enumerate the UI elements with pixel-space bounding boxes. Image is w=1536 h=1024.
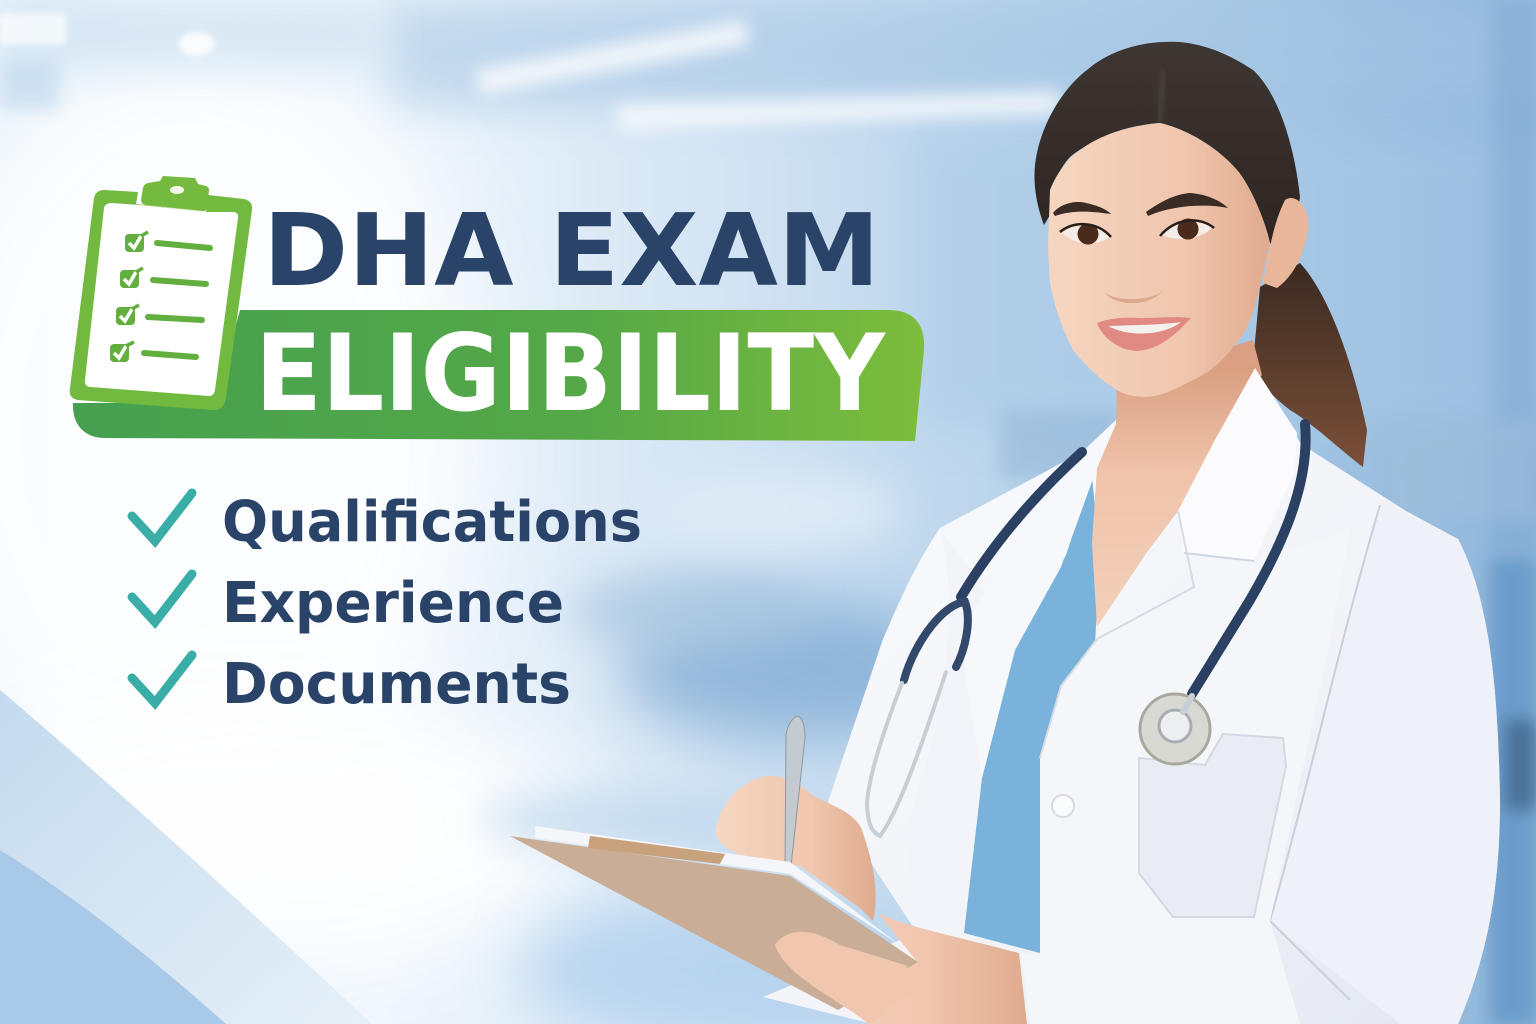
pen [785, 716, 805, 866]
clipboard checklist icon [70, 176, 924, 441]
supporting hand [773, 913, 1027, 1024]
hair part [1159, 70, 1164, 122]
doctor photo illustration [510, 42, 1500, 1024]
checklist lines [144, 243, 210, 357]
eyes [1062, 222, 1212, 243]
checklist ticks [114, 236, 141, 358]
coat body [763, 368, 1500, 1024]
left collar and lapel [960, 420, 1116, 778]
nose [1105, 290, 1163, 303]
decorative corner swoosh [0, 690, 372, 1024]
fingers over clipboard [775, 932, 920, 1024]
clipboard held by doctor [510, 836, 918, 1010]
ear [1263, 198, 1308, 288]
hair [1034, 42, 1300, 260]
checklist boxes [110, 234, 144, 362]
brows [1053, 193, 1228, 216]
neck and chest [1092, 365, 1258, 627]
label: documents: Documents [222, 652, 571, 717]
neck back [1116, 340, 1262, 450]
ponytail [1253, 263, 1367, 467]
face [1048, 123, 1270, 397]
sleeve seams and shading [1270, 500, 1500, 1024]
writing hand [716, 776, 876, 921]
clipboard frame [70, 190, 252, 410]
list: eligibility items [132, 490, 642, 717]
smile [1097, 317, 1191, 351]
label: qualifications: Qualifications [222, 490, 642, 555]
coat button [1052, 795, 1074, 817]
coat pocket [1139, 734, 1286, 917]
clipboard clip [141, 176, 209, 211]
check: qualifications [132, 493, 192, 541]
right collar [1178, 368, 1297, 561]
stethoscope [867, 424, 1306, 836]
label: experience: Experience [222, 571, 564, 636]
scrubs [964, 476, 1100, 953]
title: DHA EXAM: DHA EXAM [263, 192, 880, 309]
title: ELIGIBILITY: ELIGIBILITY [255, 312, 886, 435]
check: documents [132, 655, 192, 703]
clipboard paper [85, 203, 238, 396]
right lapel and coat front [1022, 511, 1350, 1024]
green ribbon [73, 310, 924, 441]
check: experience [132, 574, 192, 622]
